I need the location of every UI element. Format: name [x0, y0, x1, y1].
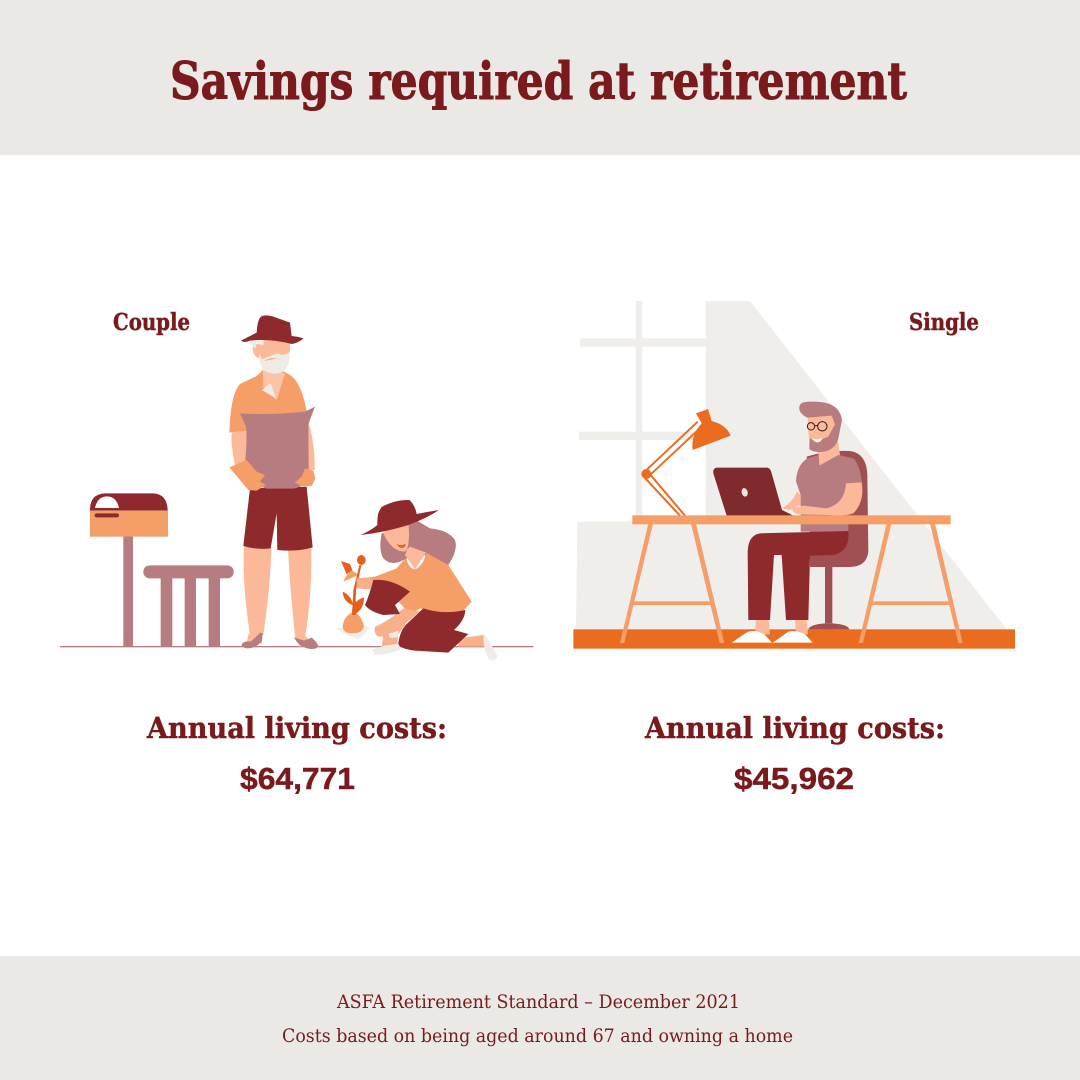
text: couple annual costs: Annual living costs: [146, 711, 447, 745]
illustration: garden scene [60, 315, 533, 649]
panel: couple [60, 309, 533, 796]
text: single annual costs: $45,962 [734, 761, 854, 796]
ground line [60, 646, 533, 647]
figure: woman planting [335, 500, 497, 660]
desk [620, 515, 963, 643]
icon: plant pot [335, 555, 370, 639]
text: couple annual costs: $64,771 [240, 761, 355, 796]
panel: single [573, 301, 1015, 796]
footer band [0, 956, 1080, 1080]
text: single annual costs: Annual living costs: [644, 711, 945, 745]
illustration: home office [573, 301, 1015, 649]
label: couple: Couple [113, 309, 190, 336]
source note: ASFA Retirement Standard – December 2021 [336, 991, 740, 1013]
floor [573, 629, 1015, 649]
icon: mailbox [90, 493, 168, 647]
icon: laptop [713, 468, 793, 516]
chair [807, 451, 868, 629]
label: single: Single [909, 309, 979, 336]
assumptions note: Costs based on being aged around 67 and owning a home [282, 1025, 793, 1047]
title: Savings required at retirement [170, 52, 907, 112]
header band [0, 0, 1080, 155]
wall and window [576, 301, 1007, 630]
figure: man with sack [229, 315, 319, 649]
icon: bench [143, 565, 234, 647]
text: couple annual costs [146, 711, 447, 796]
figure: man at laptop [732, 402, 862, 643]
text: single annual costs [644, 711, 945, 796]
icon: desk lamp [641, 409, 731, 516]
